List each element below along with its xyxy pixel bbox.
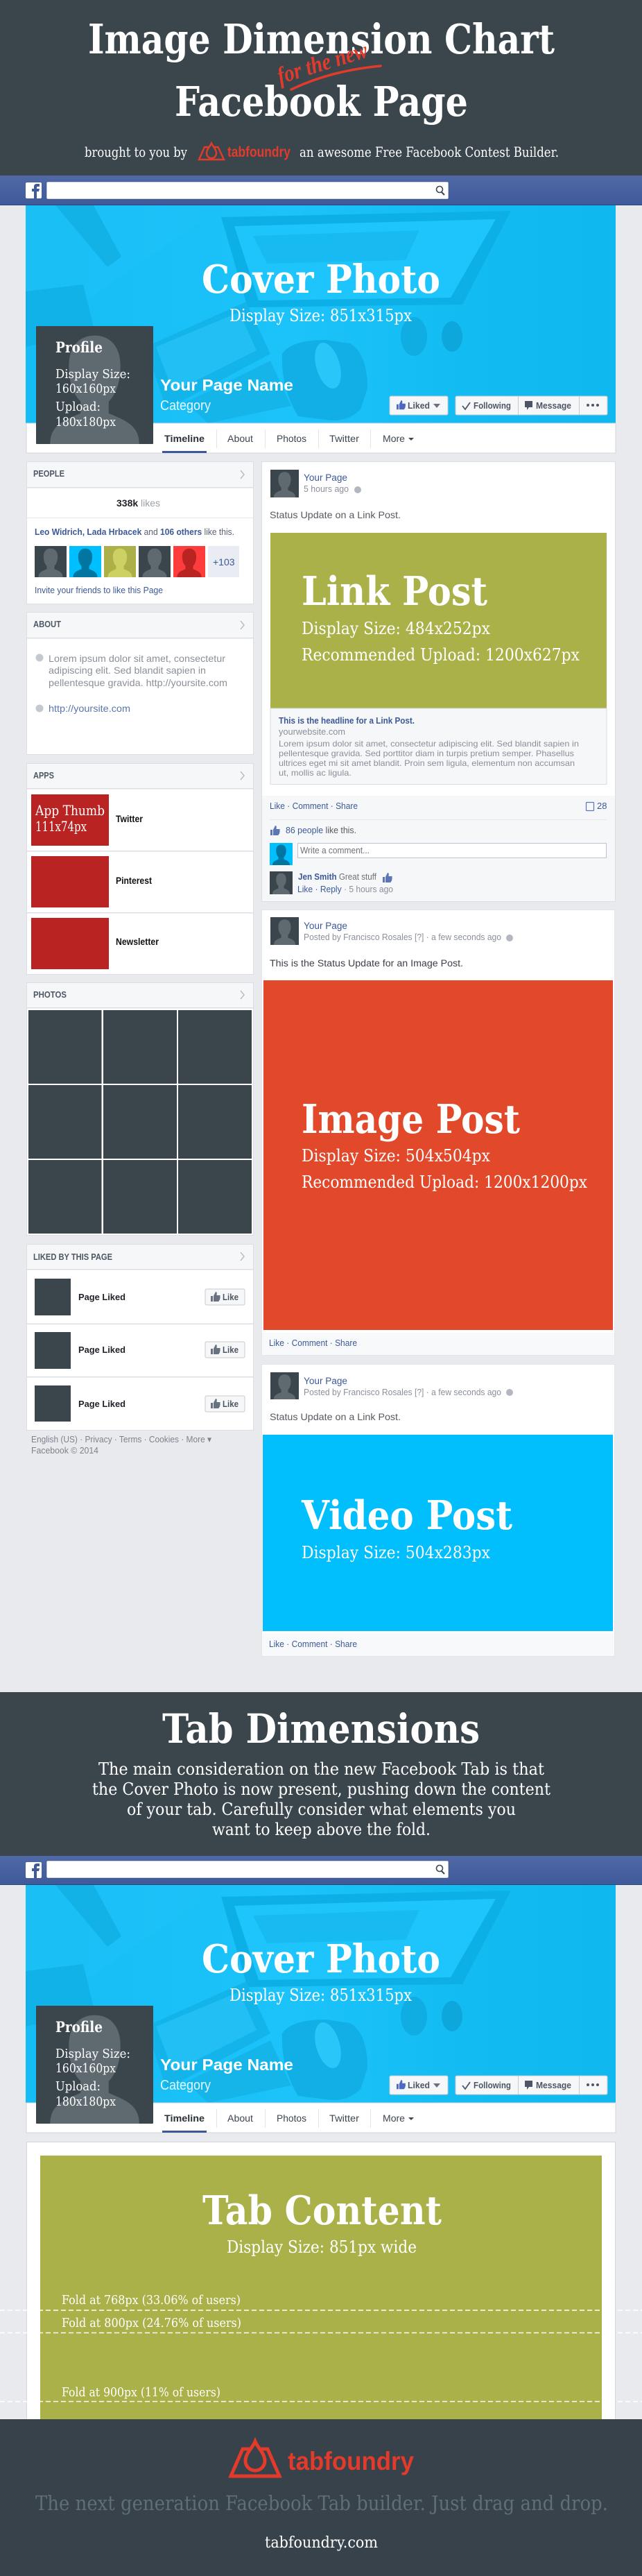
liked row 3 bbox=[35, 1385, 245, 1422]
tab bar panel: Photos bbox=[277, 2113, 306, 2124]
profile picture box: 160x160px bbox=[55, 382, 116, 396]
explanation: of your tab. Carefully consider what elements you bbox=[127, 1800, 516, 1819]
following message more buttons: Message bbox=[536, 400, 571, 411]
explanation: the Cover Photo is now present, pushing down the content bbox=[92, 1780, 550, 1799]
panel: apps: Newsletter bbox=[116, 937, 159, 947]
tab content area bbox=[40, 2156, 602, 2419]
app thumb twitter: App Thumb bbox=[35, 802, 105, 819]
post actions: Like · Comment · Share bbox=[270, 801, 358, 811]
panel: apps bbox=[26, 763, 254, 974]
cover photo background bbox=[26, 205, 511, 423]
tab bar panel: Twitter bbox=[329, 2113, 359, 2124]
panel: video post bbox=[262, 1364, 614, 1657]
link post image: Recommended Upload: 1200x627px bbox=[302, 645, 580, 665]
tab bar panel: Timeline bbox=[164, 433, 205, 444]
tab bar panel: More bbox=[383, 433, 405, 444]
cover photo background bbox=[26, 1885, 511, 2103]
post actions: Like · Comment · Share bbox=[269, 1639, 357, 1649]
liked button bbox=[390, 396, 448, 415]
profile picture box: Upload: bbox=[55, 2079, 101, 2094]
profile picture box: 180x180px bbox=[55, 415, 116, 429]
liked row 2: Like bbox=[223, 1345, 238, 1355]
fold 768: Fold at 768px (33.06% of users) bbox=[62, 2293, 241, 2308]
link post image: Display Size: 484x252px bbox=[302, 619, 490, 638]
status text: Status Update on a Link Post. bbox=[270, 1411, 401, 1422]
panel: liked by this page bbox=[26, 1245, 254, 1431]
video area: Video Post bbox=[301, 1492, 513, 1539]
liked row 2: Page Liked bbox=[78, 1345, 125, 1355]
explanation bbox=[92, 1759, 550, 1839]
tab bar panel bbox=[26, 423, 616, 453]
explanation: want to keep above the fold. bbox=[212, 1820, 431, 1839]
likes count: 338k likes bbox=[116, 497, 160, 509]
post header bbox=[270, 1372, 513, 1399]
tabfoundry wordmark: tabfoundry bbox=[227, 144, 290, 160]
following message more buttons bbox=[456, 2076, 607, 2095]
comment: Jen Smith Great stuff bbox=[298, 871, 376, 882]
fold 800: Fold at 800px (24.76% of users) bbox=[62, 2316, 241, 2330]
profile picture box: 160x160px bbox=[55, 2061, 116, 2076]
panel: people bbox=[26, 462, 254, 604]
link preview: ut, mollis ac ligula. bbox=[279, 768, 352, 778]
invite link: Invite your friends to like this Page bbox=[35, 586, 163, 595]
url: tabfoundry.com bbox=[265, 2534, 378, 2552]
red script: for the new: for the new bbox=[275, 37, 371, 89]
tab bar panel: Twitter bbox=[329, 433, 359, 444]
liked row 1 bbox=[35, 1279, 245, 1315]
liked button bbox=[390, 2076, 448, 2095]
panel: apps: Pinterest bbox=[116, 876, 152, 886]
app thumb pinterest bbox=[31, 856, 109, 907]
icon: facebook f bbox=[26, 182, 42, 198]
liked row 3: Page Liked bbox=[78, 1399, 125, 1409]
explanation: The main consideration on the new Facebook Tab is that bbox=[98, 1759, 544, 1779]
cover size: Display Size: 851x315px bbox=[229, 306, 412, 325]
profile picture box bbox=[36, 326, 153, 444]
image post area bbox=[263, 980, 613, 1330]
app thumb twitter bbox=[31, 794, 109, 846]
about text: Lorem ipsum dolor sit amet, consectetur bbox=[49, 653, 225, 664]
panel: liked by this page: LIKED BY THIS PAGE bbox=[33, 1252, 112, 1262]
facebook nav bar 2 bbox=[0, 1856, 642, 1885]
about text: adipiscing elit. Sed blandit sapien in bbox=[49, 665, 206, 676]
likes line: 86 people like this. bbox=[286, 825, 356, 835]
following message more buttons bbox=[456, 396, 607, 415]
search box bbox=[46, 1861, 449, 1878]
following message more buttons: Following bbox=[474, 2080, 511, 2090]
header banner bbox=[0, 0, 642, 176]
facebook nav bar bbox=[0, 176, 642, 205]
website link: http://yoursite.com bbox=[49, 703, 130, 714]
search box bbox=[46, 182, 449, 199]
profile picture box bbox=[36, 2006, 153, 2124]
panel: people: PEOPLE bbox=[33, 468, 64, 479]
comment box: Write a comment... bbox=[300, 845, 370, 855]
liked row 1: Page Liked bbox=[78, 1292, 125, 1302]
link post image bbox=[270, 533, 607, 708]
comment box bbox=[270, 843, 606, 865]
icon: tabfoundry logo small bbox=[199, 143, 224, 160]
comment: Like · Reply · 5 hours ago bbox=[297, 884, 393, 894]
avatar row bbox=[35, 546, 239, 577]
cover size: Display Size: 851x315px bbox=[229, 1986, 412, 2005]
liked button: Liked bbox=[408, 2080, 430, 2090]
post header: Your Page bbox=[304, 1376, 347, 1386]
comment count bbox=[587, 801, 607, 811]
footer banner bbox=[0, 2419, 642, 2576]
link preview: Lorem ipsum dolor sit amet, consectetur adipiscing elit. Sed blandit sapien in bbox=[279, 739, 579, 749]
profile picture box: Profile bbox=[55, 339, 103, 356]
cover header block bbox=[26, 205, 616, 453]
profile picture box: 180x180px bbox=[55, 2095, 116, 2109]
panel: link post bbox=[262, 462, 616, 902]
fold 900: Fold at 900px (11% of users) bbox=[62, 2385, 220, 2400]
link post image: Link Post bbox=[302, 568, 488, 615]
status text: Status Update on a Link Post. bbox=[270, 509, 401, 520]
profile picture box: Display Size: bbox=[55, 367, 130, 382]
comment bbox=[270, 871, 393, 894]
post header: Posted by Francisco Rosales [?] · a few seconds ago bbox=[304, 932, 501, 942]
tab bar panel bbox=[26, 2103, 616, 2133]
link preview: This is the headline for a Link Post. bbox=[279, 715, 415, 726]
title line 1: Image Dimension Chart bbox=[88, 15, 555, 63]
profile picture box: Upload: bbox=[55, 400, 101, 414]
liked row 1: Like bbox=[223, 1292, 238, 1302]
icon: facebook f bbox=[26, 1862, 42, 1878]
profile picture box: Profile bbox=[55, 2018, 103, 2036]
post header: 5 hours ago bbox=[304, 484, 349, 494]
liked row 3: Like bbox=[223, 1399, 238, 1409]
following message more buttons: Message bbox=[536, 2080, 571, 2090]
panel: about bbox=[26, 612, 254, 755]
panel: photos bbox=[26, 982, 254, 1235]
tabfoundry wordmark: tabfoundry bbox=[288, 2447, 414, 2475]
video area bbox=[263, 1435, 613, 1631]
tab content title: Tab Content bbox=[202, 2187, 442, 2234]
sidebar footer links: English (US) · Privacy · Terms · Cookies · More ▾ bbox=[31, 1434, 211, 1444]
post header bbox=[270, 470, 361, 497]
panel: image post bbox=[262, 910, 614, 1356]
cover title: Cover Photo bbox=[202, 257, 440, 302]
link preview: ultrices eget mi sit amet blandit. Proin sem ligula, elementum non accumsan bbox=[279, 758, 575, 768]
video area: Display Size: 504x283px bbox=[302, 1543, 490, 1562]
byline left: brought to you by bbox=[85, 144, 188, 160]
post header: Your Page bbox=[304, 921, 347, 931]
friends who like: Leo Widrich, Lada Hrbacek and 106 others like this. bbox=[35, 527, 234, 537]
page name: Your Page Name bbox=[160, 2056, 293, 2074]
panel: tab content bbox=[0, 2142, 642, 2420]
avatar row: +103 bbox=[213, 556, 235, 568]
cover header block 2 bbox=[26, 1885, 616, 2133]
tab bar panel: More bbox=[383, 2113, 405, 2124]
comment count: 28 bbox=[597, 801, 607, 811]
page name: Your Page Name bbox=[160, 376, 293, 394]
icon: tabfoundry logo bbox=[231, 2441, 279, 2476]
panel: photos: PHOTOS bbox=[33, 989, 67, 1000]
following message more buttons: Following bbox=[474, 400, 511, 411]
category: Category bbox=[160, 398, 211, 413]
byline right: an awesome Free Facebook Contest Builder. bbox=[300, 144, 559, 160]
tab bar panel: Timeline bbox=[164, 2113, 205, 2124]
title line 2: Facebook Page bbox=[175, 78, 468, 126]
tab bar panel: About bbox=[227, 433, 253, 444]
link preview: pellentesque gravida. Sed porttitor diam in turpis pretium semper. Phasellus bbox=[279, 749, 574, 758]
status text: This is the Status Update for an Image Post. bbox=[270, 958, 463, 969]
panel: apps: APPS bbox=[33, 770, 54, 781]
category: Category bbox=[160, 2078, 211, 2093]
app thumb newsletter bbox=[31, 918, 109, 969]
liked button: Liked bbox=[408, 400, 430, 411]
cover title: Cover Photo bbox=[202, 1936, 440, 1982]
post header bbox=[270, 917, 513, 945]
post actions: Like · Comment · Share bbox=[269, 1338, 357, 1348]
sidebar footer links: Facebook © 2014 bbox=[31, 1445, 98, 1456]
image post area: Image Post bbox=[302, 1096, 521, 1143]
app thumb twitter: 111x74px bbox=[35, 818, 87, 835]
heading: Tab Dimensions bbox=[162, 1705, 480, 1752]
link preview: yourwebsite.com bbox=[279, 727, 345, 737]
profile picture box: Display Size: bbox=[55, 2047, 130, 2061]
about text bbox=[49, 653, 227, 688]
image post area: Recommended Upload: 1200x1200px bbox=[302, 1172, 587, 1192]
sidebar footer links bbox=[31, 1434, 211, 1456]
tab dimensions banner bbox=[0, 1692, 642, 1856]
post header: Posted by Francisco Rosales [?] · a few seconds ago bbox=[304, 1388, 501, 1397]
liked row 2 bbox=[35, 1332, 245, 1369]
panel: about: ABOUT bbox=[33, 619, 61, 629]
tab content size: Display Size: 851px wide bbox=[227, 2237, 417, 2257]
tab bar panel: Photos bbox=[277, 433, 306, 444]
about text: pellentesque gravida. http://yoursite.com bbox=[49, 677, 227, 688]
photo grid bbox=[28, 1010, 252, 1234]
link preview bbox=[270, 708, 607, 784]
post header: Your Page bbox=[304, 472, 347, 483]
image post area: Display Size: 504x504px bbox=[302, 1146, 490, 1166]
panel: apps: Twitter bbox=[116, 814, 144, 824]
tab bar panel: About bbox=[227, 2113, 253, 2124]
